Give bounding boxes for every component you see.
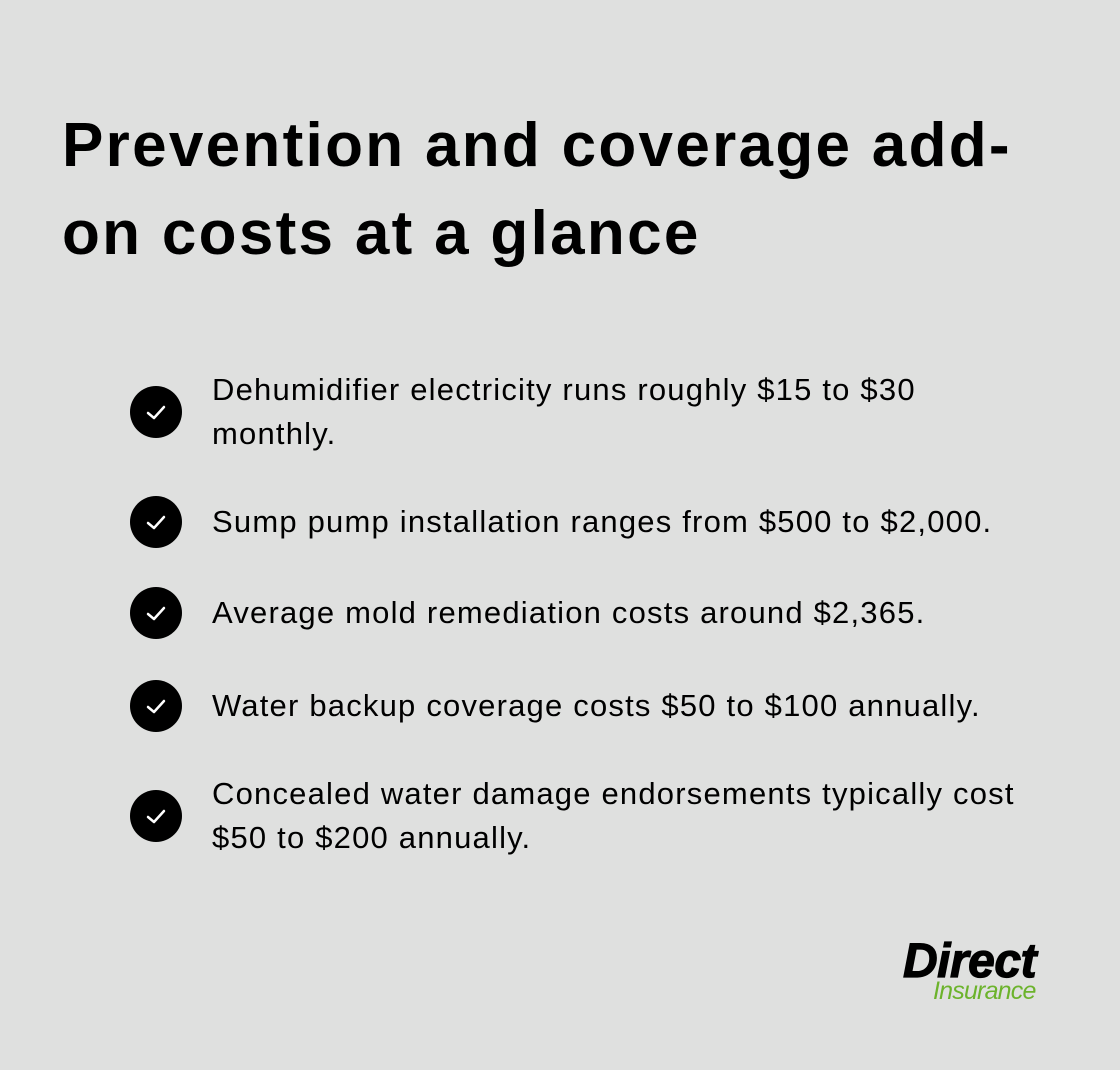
text: Dehumidifier electricity runs roughly $15 to $30 [212,372,916,407]
icon: check [130,790,182,842]
item 3 [130,587,925,639]
title [62,111,1012,268]
title: Prevention and coverage add- [62,111,1012,180]
text: Average mold remediation costs around $2,365. [212,595,925,630]
logo: Direct [903,935,1039,988]
item 4 [130,680,981,732]
title: on costs at a glance [62,199,701,268]
logo: Insurance [933,977,1036,1005]
text [212,372,916,451]
text: $50 to $200 annually. [212,820,531,855]
text: Sump pump installation ranges from $500 to $2,000. [212,504,992,539]
text: Concealed water damage endorsements typically cost [212,776,1015,811]
item 2 [130,496,992,548]
text [212,776,1015,855]
icon: check [130,680,182,732]
text: Water backup coverage costs $50 to $100 annually. [212,688,981,723]
icon: check [130,386,182,438]
text: monthly. [212,416,336,451]
icon: check [130,587,182,639]
icon: check [130,496,182,548]
item 5 [130,776,1015,855]
item 1 [130,372,916,451]
